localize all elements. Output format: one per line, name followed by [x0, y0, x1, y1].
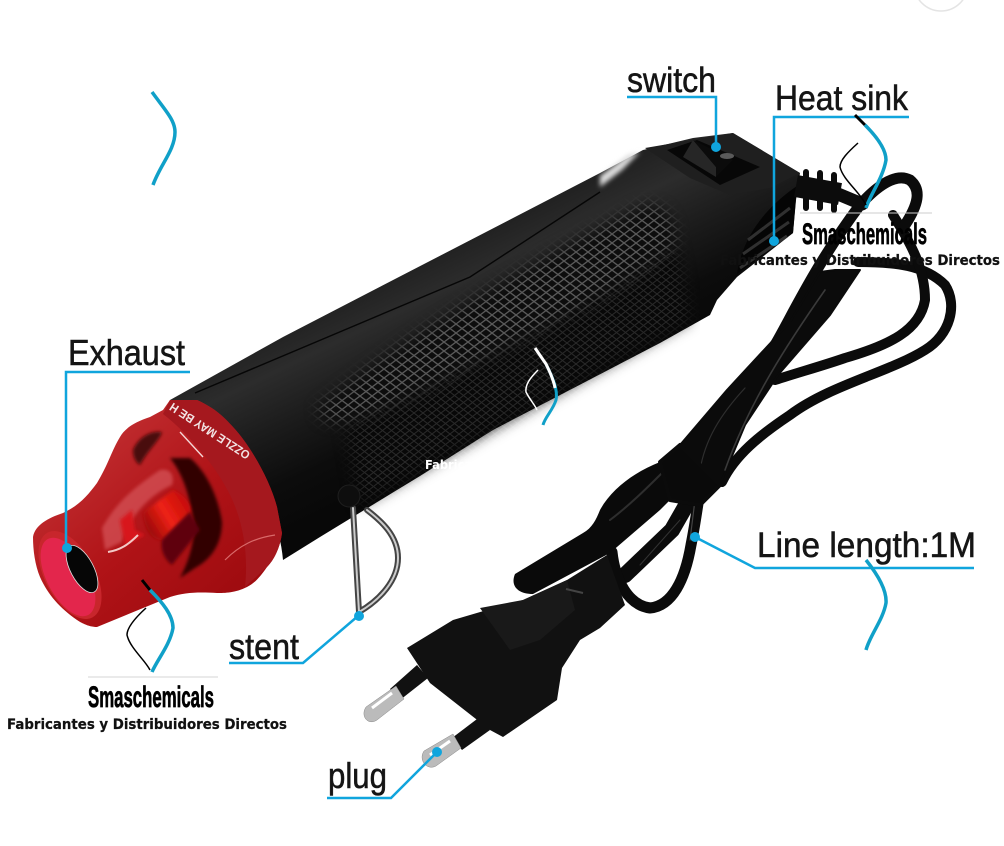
switch	[667, 140, 760, 185]
watermark logo: left squiggle	[152, 92, 175, 185]
label: Exhaust	[62, 332, 190, 553]
inner core	[143, 490, 190, 540]
body white highlight	[600, 152, 640, 187]
decorative faint arc top right	[914, 0, 968, 11]
cable: bundle	[680, 270, 860, 495]
label: stent: stent	[229, 626, 299, 667]
watermark logo: right squiggle	[866, 560, 886, 650]
cable: tie band	[660, 445, 720, 505]
label: switch: switch	[627, 61, 716, 100]
label: Line length	[690, 526, 976, 568]
plug pin 1	[364, 665, 428, 722]
body seam	[195, 192, 600, 393]
dark inner ring	[170, 458, 222, 578]
watermark logo: bottom left: Fabricantes y Distribuidores Directos	[7, 717, 287, 733]
cable: lower strands	[625, 495, 692, 575]
watermark text: center white: Fabricantes y Distribuidores Directos	[425, 458, 665, 472]
panel: red nozzle	[25, 400, 282, 629]
label: plug	[327, 747, 442, 798]
stent	[338, 485, 398, 612]
panel: heat gun body	[170, 133, 800, 560]
label: stent	[229, 611, 364, 667]
watermark logo: center squiggle	[526, 348, 556, 425]
collar text: OZZLE MAY BE H	[167, 400, 253, 462]
diamond grip texture	[314, 200, 682, 429]
watermark logo: bottom left: Smaschemicals	[88, 681, 214, 714]
label: plug: plug	[328, 755, 387, 796]
plug	[364, 555, 625, 767]
cable: top loop	[775, 178, 917, 345]
rear cap panel	[645, 133, 800, 195]
cable: lower loop	[612, 490, 700, 608]
cable: inner loop	[775, 215, 925, 380]
nozzle mouth	[25, 521, 115, 629]
watermark logo: top right	[720, 115, 1000, 269]
heat sink vents	[737, 186, 797, 274]
label: Heat sink: Heat sink	[775, 79, 908, 118]
label: Heat sink	[769, 79, 909, 246]
cable: plug strap	[514, 462, 700, 594]
strain relief	[796, 172, 862, 210]
cable: outer loop	[722, 262, 951, 482]
plug slot	[566, 589, 583, 593]
label: Line length: Line length:1M	[757, 526, 976, 565]
dark vent shadow	[133, 432, 162, 465]
label: Exhaust: Exhaust	[68, 332, 185, 373]
plug pin 2	[422, 716, 490, 767]
label: switch	[627, 61, 721, 152]
watermark logo: bottom left	[7, 580, 287, 733]
power cable	[514, 178, 951, 608]
pale highlights	[102, 470, 173, 550]
collar band	[163, 400, 282, 587]
fine grip texture	[345, 254, 700, 513]
